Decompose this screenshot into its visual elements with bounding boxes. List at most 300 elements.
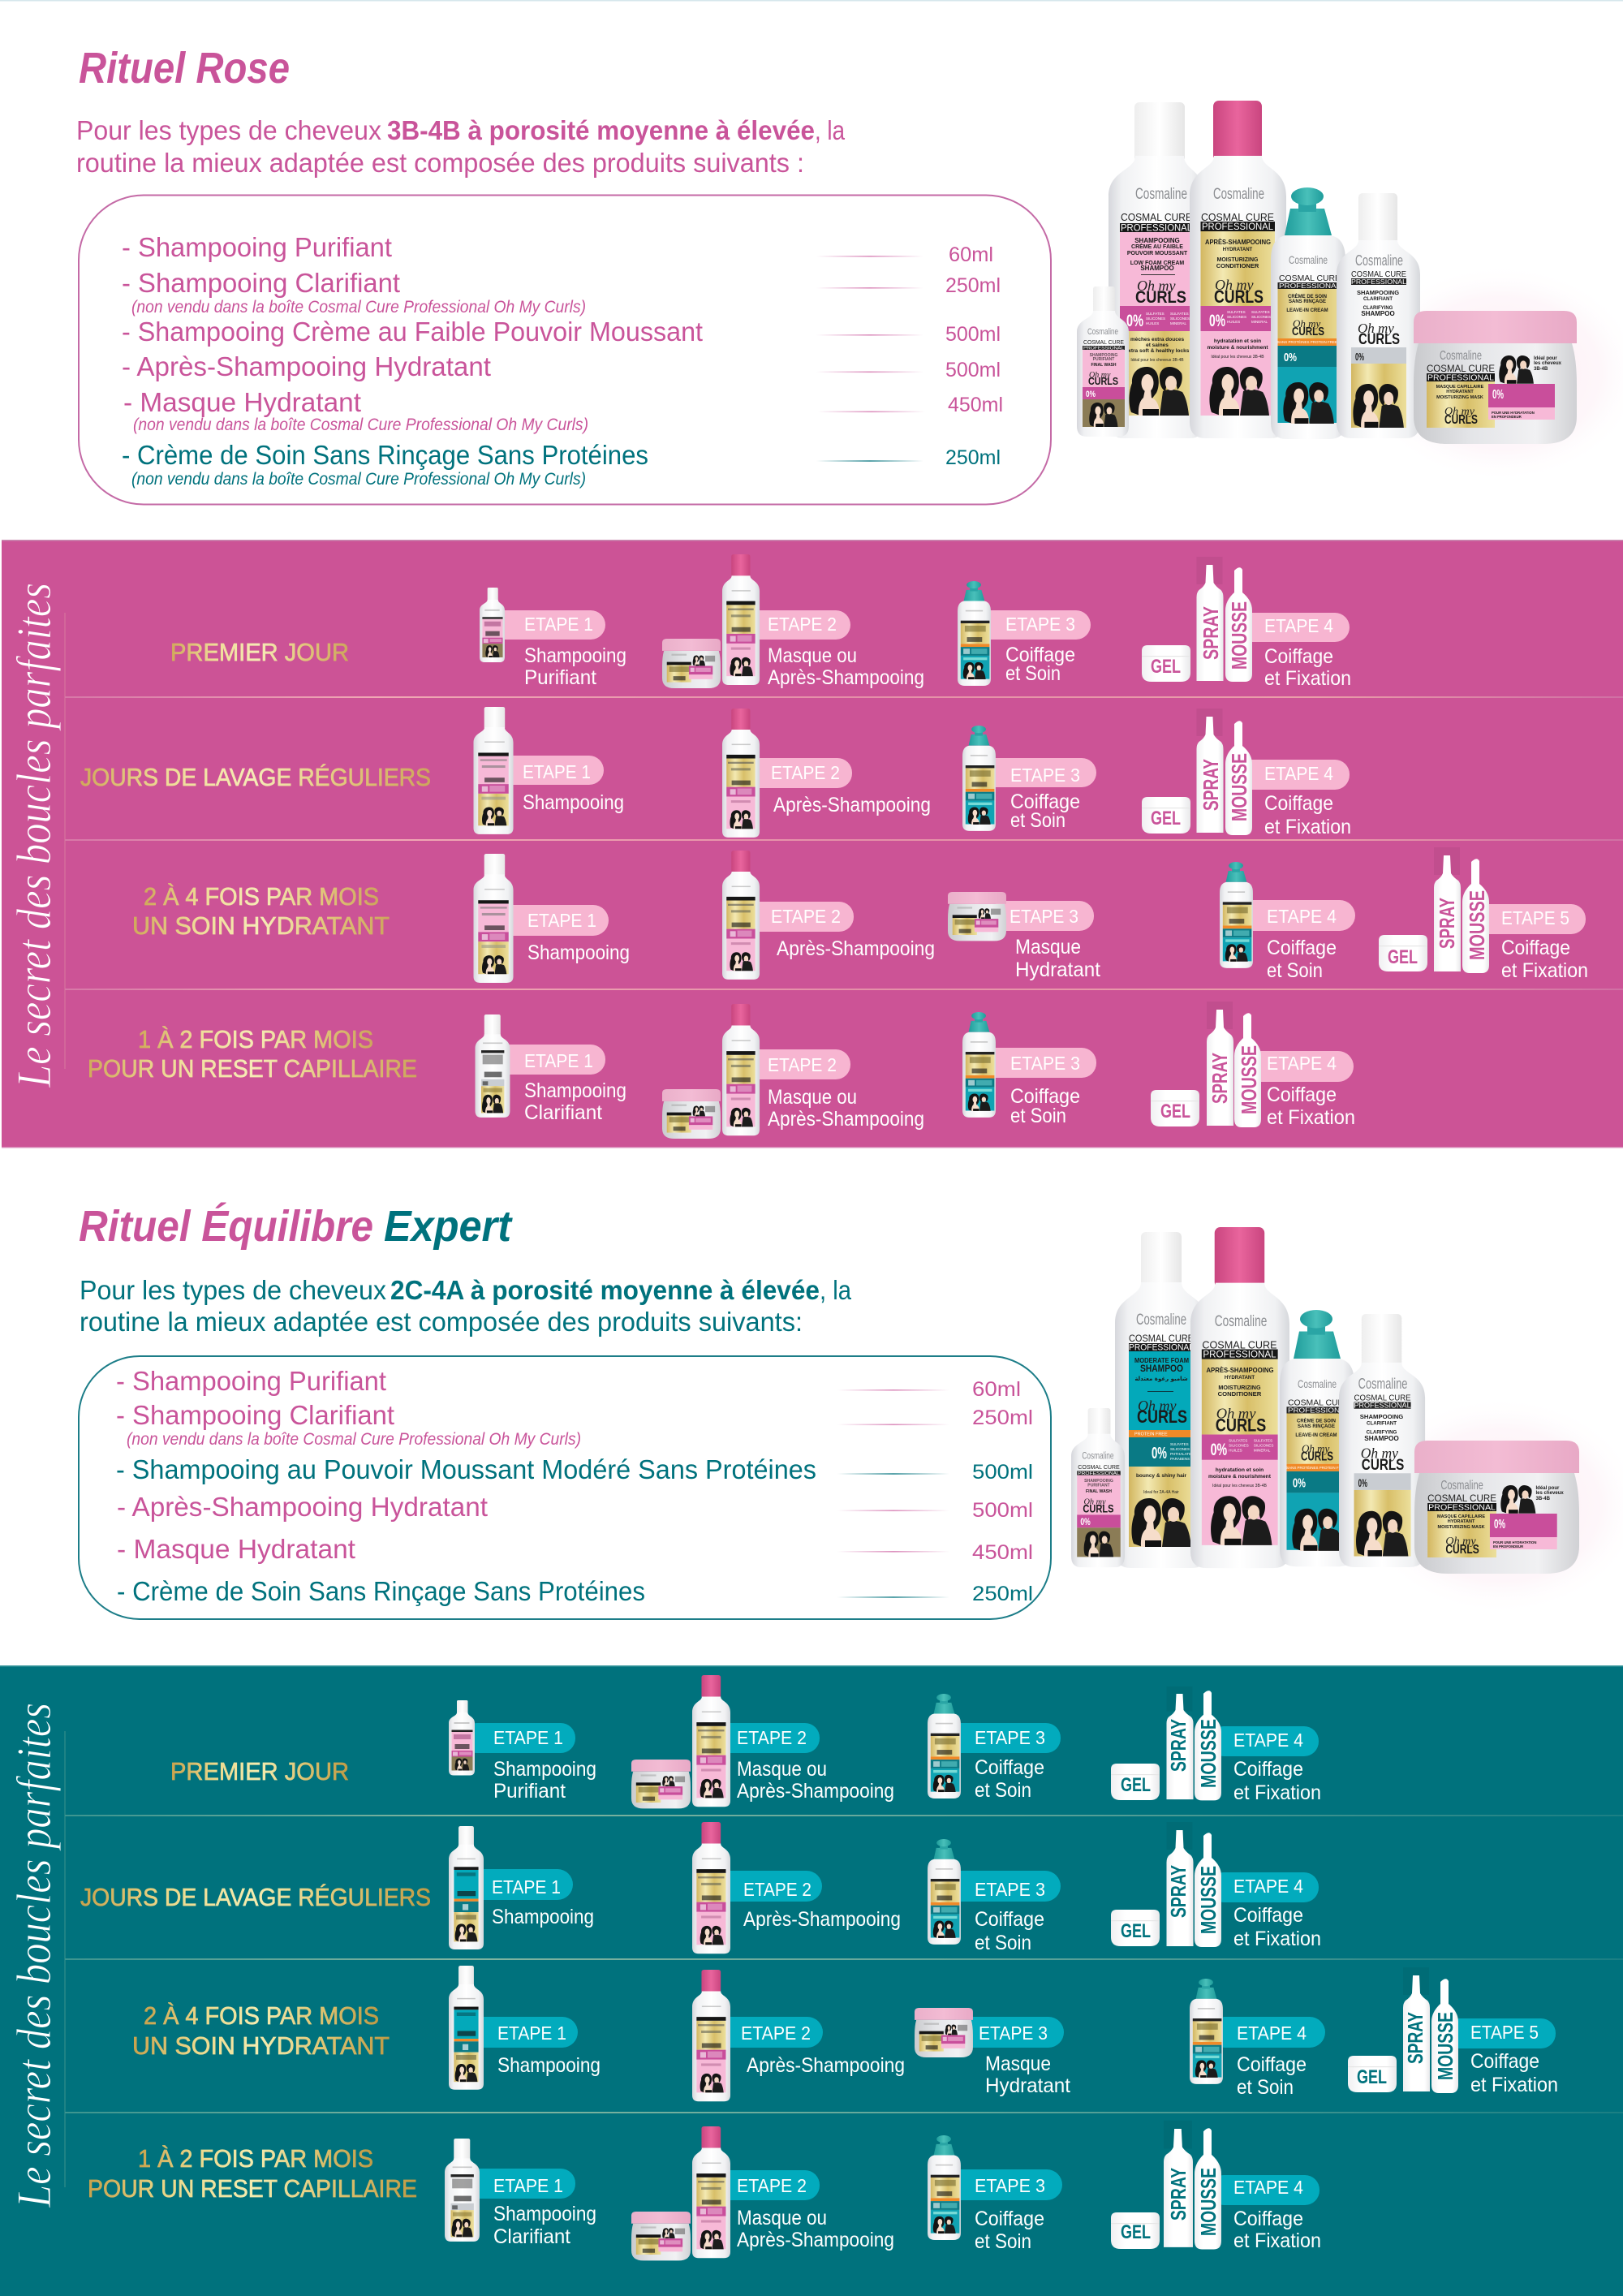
- step 3: [928, 2135, 1062, 2253]
- jar: masque hydratant: Idéal pour: [1534, 356, 1557, 361]
- bottle: shampooing purifiant: Oh my: [1083, 1498, 1106, 1507]
- step 3: Coiffage: [975, 1756, 1044, 1779]
- bottle: shampooing moussant modéré: SHAMPOO: [1140, 1363, 1183, 1374]
- tube: crème de soin: CURLS: [1301, 1450, 1333, 1464]
- step 2: Après-Shampooing: [773, 794, 931, 816]
- jar: masque hydratant: [1414, 311, 1577, 444]
- bottle: shampooing clarifiant: [1339, 1314, 1425, 1567]
- bottle: shampooing moussant modéré: 0%: [1152, 1445, 1167, 1462]
- bottle: après-shampooing: Cosmaline: [1213, 186, 1264, 203]
- list item: Masque Hydratant: - Masque Hydratant: [123, 387, 361, 417]
- bottle: shampooing purifiant: 0%: [1080, 1518, 1091, 1527]
- step 1: ETAPE 1: [493, 2175, 563, 2196]
- bottle: après-shampooing: SILICONES: [1251, 315, 1271, 319]
- list item: Shampooing Crème: - Shampooing Crème au Faible Pouvoir Moussant: [122, 317, 703, 347]
- bottle: après-shampooing: COSMAL CURE: [1201, 211, 1274, 223]
- jar: masque hydratant: CURLS: [1445, 1542, 1479, 1557]
- bottle: après-shampooing: moisture & nourishment: [1208, 1474, 1272, 1480]
- step 4: MOUSSE: [1237, 1045, 1261, 1114]
- jar: masque hydratant: POUR UNE HYDRATATION: [1492, 411, 1535, 415]
- step 4: Coiffage: [1264, 645, 1333, 668]
- bottle: shampooing purifiant: PROFESSIONAL: [1078, 1471, 1120, 1476]
- bottle: shampooing clarifiant: SHAMPOOING: [1360, 1413, 1403, 1420]
- list item: Shampooing Purifiant: [116, 1366, 1021, 1401]
- bottle: shampooing crème: 0%: [1126, 312, 1143, 330]
- bottle: après-shampooing: MOISTURIZING: [1218, 1385, 1261, 1391]
- step 4: [1111, 1822, 1321, 1950]
- tube: crème de soin: LEAVE-IN CREAM: [1295, 1433, 1337, 1438]
- step 4: [1151, 1002, 1355, 1129]
- step 4: SPRAY: [1199, 759, 1223, 811]
- tube: crème de soin: CRÈME DE SOIN: [1288, 293, 1327, 299]
- bottle: shampooing clarifiant: CLARIFYING: [1363, 306, 1393, 311]
- step 5: ETAPE 5: [1501, 907, 1569, 928]
- bottle: shampooing purifiant: Cosmaline: [1082, 1451, 1114, 1462]
- intro text: Rituel Rose: [76, 115, 846, 178]
- step 3: ETAPE 3: [1010, 765, 1080, 786]
- list item: Shampooing Clarifiant: - Shampooing Clarifiant: [122, 268, 400, 298]
- jar: masque hydratant: CURLS: [1444, 413, 1478, 427]
- bottle: shampooing clarifiant: Oh my: [1361, 1445, 1398, 1462]
- list item: Crème de Soin: 250ml: [972, 1583, 1033, 1605]
- jar: masque hydratant: PROFESSIONAL: [1428, 1503, 1496, 1512]
- tube: crème de soin: LEAVE-IN CREAM: [1286, 308, 1328, 313]
- list item: Masque Hydratant: [117, 1534, 1033, 1564]
- bottle: shampooing crème: HUILES: [1146, 321, 1159, 325]
- step 3: [948, 892, 1100, 981]
- bottle: shampooing crème: Idéal pour les cheveux 3B-4B: [1130, 358, 1184, 363]
- jar: masque hydratant: [1414, 1441, 1579, 1574]
- step 1: Clarifiant: [493, 2225, 570, 2248]
- step 3: Hydratant: [985, 2074, 1070, 2097]
- intro text: Rituel Équilibre Expert: routine la mieux adaptée est composée des produits suivants:: [80, 1307, 803, 1337]
- tube: crème de soin: SANS RINÇAGE: [1289, 299, 1326, 304]
- list item: Après-Shampooing: - Après-Shampooing Hydratant: [117, 1492, 488, 1522]
- bottle: après-shampooing: APRÈS-SHAMPOOING: [1206, 1366, 1273, 1374]
- step 1: [449, 1826, 594, 1949]
- list item: Shampooing Clarifiant: - Shampooing Clarifiant: [116, 1400, 394, 1430]
- step 2: [631, 2126, 894, 2260]
- tube: crème de soin: [1271, 187, 1345, 439]
- list item: Après-Shampooing: 500ml: [945, 359, 1001, 381]
- list item: Shampooing Purifiant: 60ml: [972, 1378, 1021, 1401]
- step 4: et Soin: [1267, 959, 1323, 982]
- list item: Shampooing Purifiant: [122, 232, 993, 266]
- bottle: shampooing crème: LOW FOAM CREAM: [1130, 261, 1184, 266]
- step 4: MOUSSE: [1227, 753, 1251, 821]
- step 5: et Fixation: [1470, 2074, 1558, 2096]
- list item: Shampooing Clarifiant: (non vendu dans la boîte Cosmal Cure Professional Oh My Curls): [131, 298, 586, 317]
- bottle: après-shampooing: Oh my: [1215, 277, 1253, 293]
- bottle: shampooing clarifiant: PROFESSIONAL: [1351, 278, 1406, 286]
- step 4: ETAPE 4: [1233, 1876, 1303, 1897]
- jar: masque hydratant: EN PROFONDEUR: [1492, 415, 1522, 419]
- step 4: SPRAY: [1166, 2168, 1190, 2221]
- tube: crème de soin: Cosmaline: [1298, 1377, 1337, 1390]
- step 4: Coiffage: [1267, 1083, 1337, 1106]
- row label: 1 À 2 FOIS PAR MOIS: [138, 1025, 373, 1053]
- list item: Shampooing Crème: 500ml: [945, 323, 1001, 346]
- intro text: Rituel Rose: Pour les types de cheveux: [76, 115, 381, 145]
- tube: crème de soin: CURLS: [1292, 325, 1324, 338]
- bottle: après-shampooing: SILICONES: [1227, 315, 1246, 319]
- bottle: shampooing clarifiant: PROFESSIONAL: [1354, 1402, 1411, 1410]
- bottle: après-shampooing: PROFESSIONAL: [1202, 221, 1273, 232]
- step 2: ETAPE 2: [768, 614, 837, 635]
- bottle: shampooing crème: CURLS: [1135, 288, 1186, 307]
- step 4: SPRAY: [1208, 1053, 1232, 1104]
- bottle: shampooing purifiant: FINAL WASH: [1086, 1489, 1112, 1494]
- step 2: Après-Shampooing: [777, 937, 935, 960]
- step 3: [958, 581, 1091, 686]
- step 1: Shampooing: [524, 1079, 626, 1102]
- title: Rituel Rose: Rituel Rose: [79, 44, 290, 93]
- tube: crème de soin: PROFESSIONAL: [1279, 282, 1341, 290]
- row label: JOURS DE LAVAGE RÉGULIERS: [80, 763, 431, 791]
- list item: Après-Shampooing: - Après-Shampooing Hydratant: [122, 351, 491, 381]
- list item: Shampooing au Pouvoir Moussant Modéré: 500ml: [972, 1461, 1033, 1484]
- list item: Shampooing Clarifiant: (non vendu dans la boîte Cosmal Cure Professional Oh My Curls): [127, 1430, 581, 1449]
- bottle: shampooing purifiant: SHAMPOOING: [1090, 353, 1117, 358]
- step 5: SPRAY: [1435, 898, 1459, 949]
- bottle: shampooing moussant modéré: SILICONES: [1170, 1447, 1190, 1451]
- bottle: shampooing purifiant: FINAL WASH: [1091, 363, 1117, 368]
- step 3: [962, 726, 1096, 832]
- bottle: shampooing clarifiant: [1337, 193, 1420, 438]
- list item: Crème de Soin: 250ml: [945, 446, 1001, 469]
- bottle: après-shampooing: MINERAL: [1254, 1449, 1271, 1453]
- step 4: GEL: [1121, 1774, 1151, 1796]
- tube: crème de soin: CRÈME DE SOIN: [1297, 1418, 1336, 1424]
- step 1: [474, 707, 624, 834]
- jar: masque hydratant: Cosmaline: [1440, 1478, 1483, 1493]
- list item: Crème de Soin: (non vendu dans la boîte Cosmal Cure Professional Oh My Curls): [131, 470, 586, 489]
- bottle: shampooing crème: SULFATES: [1170, 312, 1189, 316]
- step 3: Coiffage: [975, 1908, 1044, 1931]
- jar: masque hydratant: Oh my: [1444, 406, 1475, 418]
- step 4: GEL: [1121, 1920, 1151, 1942]
- bottle: après-shampooing: HYDRATANT: [1225, 1375, 1255, 1381]
- step 3: Masque: [1015, 936, 1081, 958]
- step 1: Shampooing: [493, 2203, 596, 2225]
- bottle: shampooing crème: [1109, 102, 1205, 438]
- step 1: ETAPE 1: [492, 1876, 561, 1898]
- step 4: et Fixation: [1233, 2229, 1321, 2252]
- step 4: MOUSSE: [1196, 2168, 1220, 2236]
- bottle: shampooing purifiant: CURLS: [1083, 1502, 1114, 1514]
- row: Jours de lavage réguliers: [80, 1822, 1321, 1954]
- step 5: Coiffage: [1501, 937, 1570, 959]
- step 2: [662, 1004, 924, 1139]
- jar: masque hydratant: 3B-4B: [1534, 367, 1548, 372]
- step 4: GEL: [1121, 2221, 1151, 2243]
- top hairline: [0, 0, 1623, 2]
- product group: Rituel Équilibre Expert bottles: [1071, 1227, 1623, 1615]
- bottle: shampooing moussant modéré: PHTHALATES: [1170, 1452, 1194, 1456]
- bottle: shampooing clarifiant: Cosmaline: [1358, 1375, 1407, 1392]
- step 4: et Fixation: [1264, 816, 1351, 838]
- bottle: shampooing clarifiant: CLARIFYING: [1367, 1430, 1397, 1436]
- step 4: Coiffage: [1233, 2208, 1303, 2230]
- step 4: [1142, 557, 1351, 690]
- row label: 2 À 4 FOIS PAR MOIS: [144, 882, 379, 911]
- jar: masque hydratant: POUR UNE HYDRATATION: [1493, 1540, 1536, 1544]
- bottle: shampooing clarifiant: CURLS: [1358, 331, 1400, 348]
- bottle: shampooing purifiant: Cosmaline: [1087, 327, 1118, 337]
- step 1: ETAPE 1: [493, 1727, 563, 1748]
- tube: crème de soin: 0%: [1284, 351, 1297, 364]
- bottle: après-shampooing: hydratation et soin: [1214, 338, 1261, 344]
- bottle: shampooing purifiant: PROFESSIONAL: [1083, 346, 1124, 351]
- step 3: ETAPE 3: [1010, 1053, 1080, 1074]
- bottle: shampooing crème: SHAMPOO: [1140, 265, 1174, 272]
- step 4: MOUSSE: [1196, 1866, 1220, 1934]
- step 3: [962, 1012, 1096, 1127]
- bottle: shampooing crème: et saines: [1146, 342, 1169, 348]
- bottle: après-shampooing: SULFATES: [1254, 1439, 1272, 1443]
- bottle: après-shampooing: CONDITIONER: [1218, 1390, 1262, 1398]
- list item: Shampooing Clarifiant: [116, 1400, 1033, 1449]
- tube: crème de soin: 0%: [1293, 1476, 1306, 1490]
- list item: Après-Shampooing: 500ml: [972, 1499, 1033, 1522]
- step 1: Shampooing: [497, 2054, 601, 2077]
- step 1: ETAPE 1: [524, 614, 593, 635]
- step 4: GEL: [1151, 808, 1181, 829]
- step 3: Coiffage: [1010, 1085, 1080, 1108]
- bottle: shampooing purifiant: PURIFIANT: [1093, 357, 1114, 362]
- bottle: shampooing moussant modéré: PROFESSIONAL: [1129, 1342, 1194, 1352]
- intro text: Rituel Équilibre Expert: [80, 1275, 852, 1337]
- list item: Après-Shampooing: [117, 1492, 1033, 1522]
- step 4: et Soin: [1237, 2076, 1294, 2099]
- list item: Crème de Soin: [122, 440, 1001, 489]
- bottle: shampooing clarifiant: SHAMPOO: [1361, 310, 1395, 317]
- bottle: après-shampooing: MINERAL: [1251, 320, 1268, 324]
- step 1: Shampooing: [523, 791, 624, 814]
- bottle: shampooing clarifiant: CLARIFIANT: [1363, 297, 1393, 302]
- bottle: après-shampooing: HYDRATANT: [1223, 248, 1253, 252]
- step 4: ETAPE 4: [1233, 2177, 1303, 2198]
- jar: masque hydratant: HYDRATANT: [1446, 390, 1474, 394]
- jar: masque hydratant: EN PROFONDEUR: [1493, 1544, 1523, 1549]
- list item: Masque Hydratant: - Masque Hydratant: [117, 1534, 355, 1564]
- section: Rituel Équilibre Expert header: [79, 1202, 852, 1337]
- bottle: shampooing moussant modéré: PARABENS: [1170, 1457, 1190, 1461]
- step 5: [1379, 847, 1588, 982]
- step 4: ETAPE 4: [1237, 2022, 1307, 2044]
- list item: Crème de Soin: - Crème de Soin Sans Rinçage Sans Protéines: [117, 1576, 645, 1606]
- step 4: Coiffage: [1237, 2053, 1307, 2076]
- bottle: shampooing purifiant: COSMAL CURE: [1083, 340, 1124, 346]
- step 3: ETAPE 3: [975, 1879, 1045, 1900]
- intro text: Rituel Équilibre Expert: , la: [820, 1275, 852, 1305]
- step 1: ETAPE 1: [524, 1050, 593, 1071]
- step 3: Coiffage: [1010, 790, 1080, 813]
- step 1: [480, 588, 626, 689]
- bottle: shampooing clarifiant: COSMAL CURE: [1351, 270, 1406, 279]
- bottle: après-shampooing: Oh my: [1216, 1405, 1256, 1421]
- step 2: Après-Shampooing: [768, 666, 924, 689]
- step 5: et Fixation: [1501, 959, 1588, 982]
- step 1: [445, 2139, 596, 2248]
- tube: crème de soin: PROFESSIONAL: [1288, 1406, 1350, 1414]
- bottle: après-shampooing: hydratation et soin: [1216, 1467, 1264, 1473]
- step 1: [449, 1966, 601, 2090]
- step 2: Après-Shampooing: [747, 2054, 905, 2077]
- step 4: [1142, 709, 1351, 838]
- step 1: [476, 1014, 626, 1124]
- row label: [132, 2001, 390, 2060]
- bottle: shampooing clarifiant: CLARIFIANT: [1367, 1420, 1397, 1426]
- product group: Rituel Rose bottles: [1077, 101, 1623, 483]
- bottle: après-shampooing: SILICONES: [1229, 1444, 1249, 1448]
- row: 1 à 2 fois par mois: [88, 2121, 1321, 2260]
- jar: masque hydratant: MOISTURIZING MASK: [1437, 1525, 1485, 1530]
- bottle: après-shampooing: Idéal pour les cheveux 3B-4B: [1212, 1484, 1268, 1488]
- step 4: et Fixation: [1264, 667, 1351, 690]
- step 1: Shampooing: [524, 644, 626, 667]
- bottle: shampooing moussant modéré: bouncy & shiny hair: [1136, 1473, 1187, 1479]
- bottle: shampooing moussant modéré: COSMAL CURE: [1129, 1333, 1194, 1344]
- step 3: et Soin: [1010, 1105, 1066, 1127]
- step 1: Purifiant: [493, 1780, 566, 1803]
- step 3: [915, 2008, 1070, 2097]
- bottle: shampooing crème: SILICONES: [1146, 317, 1165, 321]
- bottle: après-shampooing: SULFATES: [1229, 1439, 1247, 1443]
- row: Jours de lavage réguliers: [80, 707, 1351, 838]
- tube: crème de soin: SANS PROTÉINES PROTEIN FREE: [1286, 1465, 1346, 1470]
- step 2: Masque ou: [768, 1086, 857, 1109]
- step 5: Coiffage: [1470, 2050, 1539, 2073]
- bottle: shampooing crème: COSMAL CURE: [1121, 211, 1192, 223]
- step 3: ETAPE 3: [1010, 906, 1078, 927]
- bottle: shampooing purifiant: Oh my: [1089, 371, 1111, 380]
- step 2: Masque ou: [737, 2207, 827, 2229]
- bottle: shampooing clarifiant: CURLS: [1362, 1456, 1404, 1474]
- row: 2 à 4 fois par mois: [132, 847, 1588, 983]
- step 4: [1190, 1979, 1325, 2099]
- row label: [88, 2144, 417, 2203]
- intro text: Rituel Rose: 3B-4B à porosité moyenne à élevée: [387, 115, 815, 145]
- step 3: et Soin: [975, 1779, 1031, 1802]
- bottle: shampooing moussant modéré: PROTEIN FREE: [1134, 1432, 1168, 1437]
- vertical script slogan: Le secret des boucles parfaites: [7, 583, 61, 1088]
- bottle: shampooing crème: mèches extra douces: [1130, 337, 1184, 342]
- bottle: shampooing purifiant: CURLS: [1088, 375, 1118, 387]
- list item: Shampooing Clarifiant: [122, 268, 1001, 317]
- bottle: après-shampooing: CONDITIONER: [1216, 262, 1259, 269]
- list item: Shampooing Clarifiant: 250ml: [972, 1406, 1033, 1429]
- step 4: MOUSSE: [1196, 1719, 1220, 1788]
- step 3: Coiffage: [1005, 644, 1075, 666]
- step 4: [1111, 2121, 1321, 2252]
- row label: POUR UN RESET CAPILLAIRE: [88, 2174, 417, 2203]
- title: Rituel Équilibre Expert: Rituel Équilibre: [79, 1202, 373, 1251]
- step 4: Coiffage: [1264, 792, 1333, 815]
- step 4: et Fixation: [1233, 1781, 1321, 1804]
- bottle: shampooing purifiant: [1077, 286, 1129, 437]
- row label: PREMIER JOUR: [170, 638, 349, 666]
- step 1: Shampooing: [527, 941, 630, 964]
- jar: masque hydratant: MASQUE CAPILLAIRE: [1437, 1514, 1485, 1519]
- bottle: shampooing purifiant: [1071, 1408, 1125, 1567]
- list item: Masque Hydratant: [123, 387, 1003, 434]
- tube: crème de soin: Oh my: [1302, 1442, 1329, 1454]
- list item: Shampooing Purifiant: - Shampooing Purifiant: [116, 1366, 386, 1396]
- jar: masque hydratant: les cheveux: [1535, 1491, 1564, 1496]
- step 4: SPRAY: [1166, 1719, 1190, 1772]
- bottle: shampooing crème: POUVOIR MOUSSANT: [1127, 251, 1188, 256]
- intro text: Rituel Équilibre Expert: 2C-4A à porosité moyenne à élevée: [390, 1275, 820, 1305]
- row label: [88, 1025, 417, 1083]
- tube: crème de soin: Oh my: [1293, 317, 1321, 330]
- row label: 1 À 2 FOIS PAR MOIS: [138, 2144, 373, 2173]
- panel: Rituel Rose routine: [2, 540, 1623, 1148]
- bottle: shampooing clarifiant: COSMAL CURE: [1354, 1394, 1411, 1402]
- jar: masque hydratant: 0%: [1494, 1517, 1505, 1531]
- bottle: après-shampooing: MOISTURIZING: [1217, 257, 1259, 263]
- tube: crème de soin: COSMAL CURE: [1279, 274, 1341, 283]
- jar: masque hydratant: Idéal pour: [1535, 1486, 1560, 1491]
- step 1: Shampooing: [493, 1758, 596, 1781]
- step 4: GEL: [1160, 1101, 1190, 1122]
- step 2: Après-Shampooing: [737, 1780, 894, 1803]
- bottle: après-shampooing: CURLS: [1216, 1415, 1266, 1435]
- jar: masque hydratant: PROFESSIONAL: [1427, 373, 1494, 383]
- bottle: après-shampooing: moisture & nourishment: [1207, 345, 1268, 351]
- step 2: [722, 851, 935, 980]
- bottle: shampooing crème: SHAMPOOING: [1134, 237, 1180, 244]
- jar: masque hydratant: 3B-4B: [1535, 1497, 1551, 1501]
- step 4: SPRAY: [1166, 1865, 1190, 1918]
- list item: Shampooing au Pouvoir Moussant Modéré: - Shampooing au Pouvoir Moussant Modéré Sans Protéines: [116, 1454, 816, 1484]
- step 1: Clarifiant: [524, 1101, 602, 1124]
- bottle: shampooing purifiant: PURIFIANT: [1087, 1483, 1110, 1488]
- step 3: Coiffage: [975, 2208, 1044, 2230]
- row label: [132, 882, 390, 940]
- step 5: MOUSSE: [1465, 890, 1489, 960]
- list item: Masque Hydratant: 450ml: [948, 394, 1003, 416]
- step 1: ETAPE 1: [497, 2022, 566, 2044]
- bottle: shampooing purifiant: COSMAL CURE: [1078, 1463, 1120, 1471]
- intro text: Rituel Rose: routine la mieux adaptée est composée des produits suivants :: [76, 148, 804, 178]
- list item: Masque Hydratant: (non vendu dans la boîte Cosmal Cure Professional Oh My Curls): [133, 416, 588, 434]
- step 1: [449, 1700, 596, 1803]
- jar: masque hydratant: MOISTURIZING MASK: [1436, 395, 1483, 400]
- step 3: et Soin: [1010, 809, 1065, 832]
- step 2: ETAPE 2: [741, 2022, 811, 2044]
- step 2: [692, 1970, 905, 2101]
- list item: Masque Hydratant: 450ml: [972, 1541, 1033, 1564]
- bottle: shampooing moussant modéré: SULFATES: [1170, 1442, 1189, 1446]
- step 2: Après-Shampooing: [737, 2229, 894, 2251]
- step 4: ETAPE 4: [1264, 763, 1333, 784]
- step 4: ETAPE 4: [1267, 1053, 1337, 1074]
- step 4: et Fixation: [1267, 1106, 1355, 1129]
- bottle: après-shampooing: APRÈS-SHAMPOOING: [1205, 239, 1271, 246]
- row label: POUR UN RESET CAPILLAIRE: [88, 1054, 417, 1083]
- row label: UN SOIN HYDRATANT: [132, 2031, 390, 2060]
- bottle: shampooing purifiant: 0%: [1086, 390, 1096, 399]
- row label: UN SOIN HYDRATANT: [132, 911, 390, 940]
- jar: masque hydratant: 0%: [1492, 388, 1504, 402]
- step 4: [1111, 1686, 1321, 1804]
- row label: JOURS DE LAVAGE RÉGULIERS: [80, 1883, 431, 1911]
- step 3: Masque: [985, 2053, 1051, 2075]
- step 3: [928, 1839, 1061, 1954]
- step 3: [928, 1694, 1061, 1802]
- step 5: [1348, 1967, 1558, 2096]
